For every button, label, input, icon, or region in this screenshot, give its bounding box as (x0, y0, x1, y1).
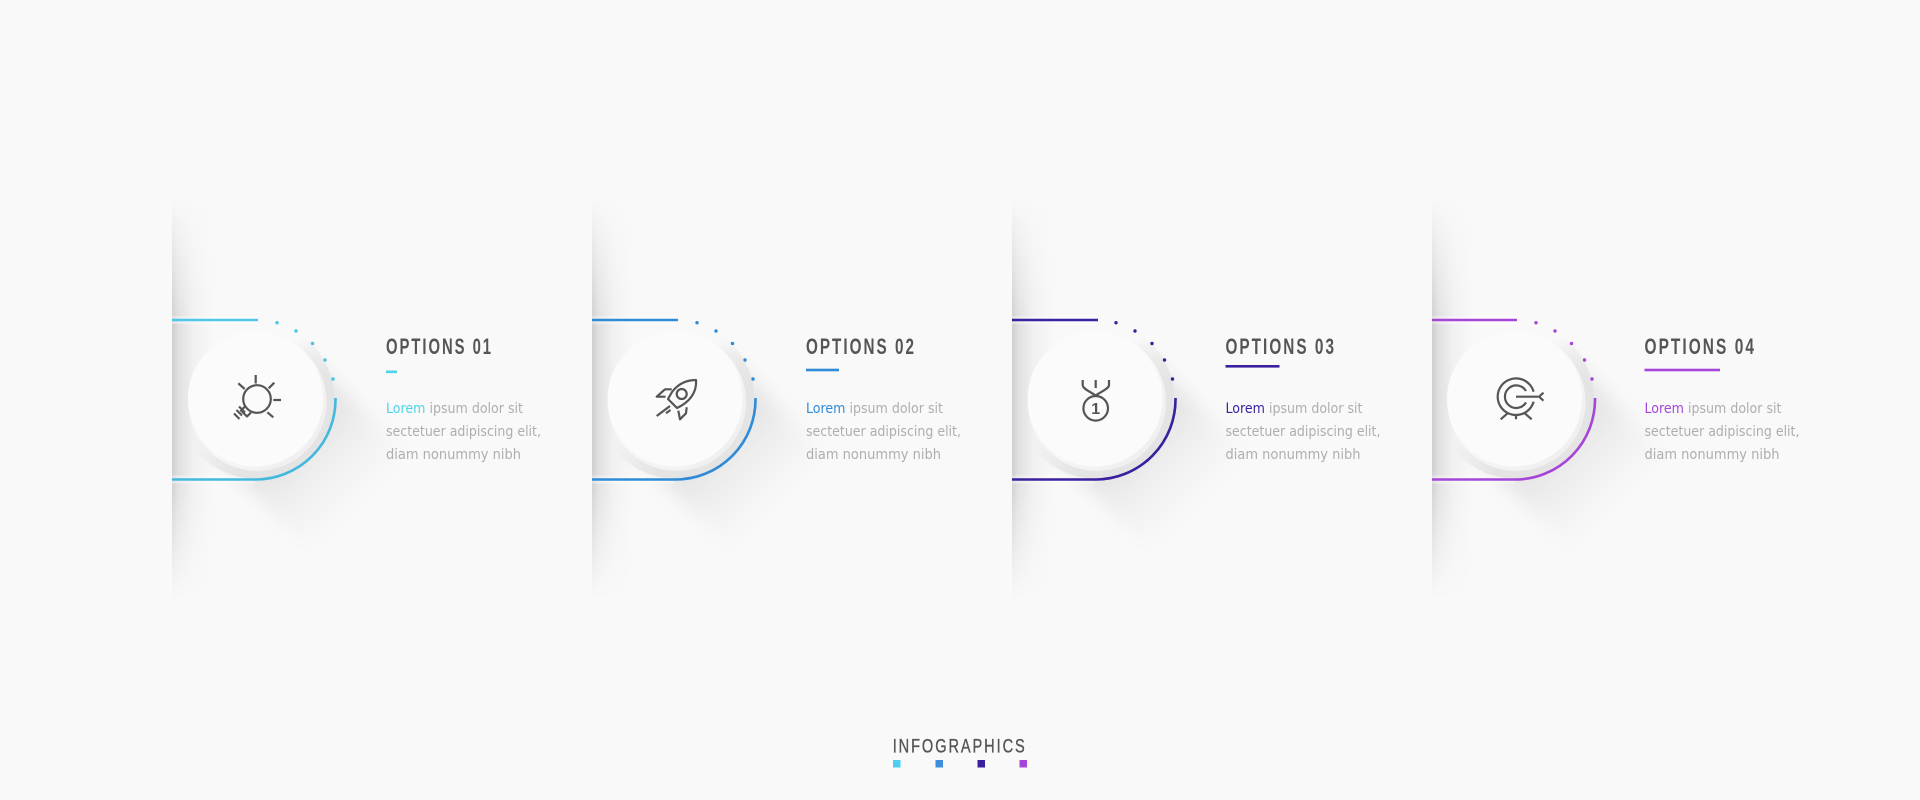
underline 04 (1644, 369, 1720, 371)
panel shadow 01 (172, 222, 194, 574)
footer colour squares (893, 760, 1027, 768)
connector line 03 (1012, 320, 1176, 480)
body text 01: diam nonummy nibh (386, 447, 521, 463)
body text 01: Lorem ipsum dolor sit (386, 401, 523, 417)
body text 02: Lorem ipsum dolor sit (806, 401, 943, 417)
panel shadow 04 (1432, 222, 1454, 574)
footer label: INFOGRAPHICS (893, 737, 1027, 758)
icon: target (1498, 378, 1544, 419)
underline 01 (386, 370, 397, 373)
body text 02: diam nonummy nibh (806, 447, 941, 463)
icon: medal (1083, 380, 1109, 421)
body text 04: Lorem ipsum dolor sit (1644, 401, 1782, 417)
icon: medal: 1 (1091, 401, 1100, 418)
body text 02: sectetuer adipiscing elit, (806, 424, 961, 440)
body text 03: sectetuer adipiscing elit, (1226, 424, 1380, 440)
dots 03 (1114, 321, 1174, 381)
heading 02: OPTIONS 02 (806, 334, 916, 359)
connector line 04 (1432, 320, 1595, 480)
connector line 01 (172, 320, 336, 480)
circle 04 (1447, 332, 1586, 471)
icon: light bulb (234, 375, 281, 419)
icon: rocket (657, 380, 696, 419)
body text 01 (386, 401, 541, 463)
long shadow 02 (628, 351, 840, 564)
long shadow 01 (208, 351, 420, 564)
circle 02 (608, 332, 746, 471)
heading 04: OPTIONS 04 (1644, 334, 1756, 359)
underline 03 (1226, 365, 1280, 368)
heading 03: OPTIONS 03 (1226, 334, 1336, 359)
circle 03 (1028, 332, 1166, 471)
long shadow 04 (1468, 351, 1680, 564)
circle 01 (188, 332, 326, 471)
heading 01: OPTIONS 01 (386, 334, 493, 359)
panel: options 02 (592, 222, 960, 574)
body text 02 (806, 401, 961, 463)
body text 04 (1644, 401, 1800, 463)
underline 02 (806, 369, 839, 371)
panel: options 04 (1432, 222, 1798, 574)
body text 04: sectetuer adipiscing elit, (1644, 424, 1800, 440)
connector line 02 (592, 320, 756, 480)
body text 03 (1226, 401, 1380, 463)
panel shadow 02 (592, 222, 614, 574)
panel shadow 03 (1012, 222, 1034, 574)
body text 03: Lorem ipsum dolor sit (1226, 401, 1363, 417)
panel: options 03 (1012, 222, 1380, 574)
dots 01 (275, 321, 335, 381)
panel: options 01 (172, 222, 540, 574)
body text 01: sectetuer adipiscing elit, (386, 424, 541, 440)
dots 04 (1534, 321, 1594, 381)
long shadow 03 (1048, 351, 1260, 564)
body text 03: diam nonummy nibh (1226, 447, 1360, 463)
body text 04: diam nonummy nibh (1644, 447, 1780, 463)
dots 02 (695, 321, 755, 381)
